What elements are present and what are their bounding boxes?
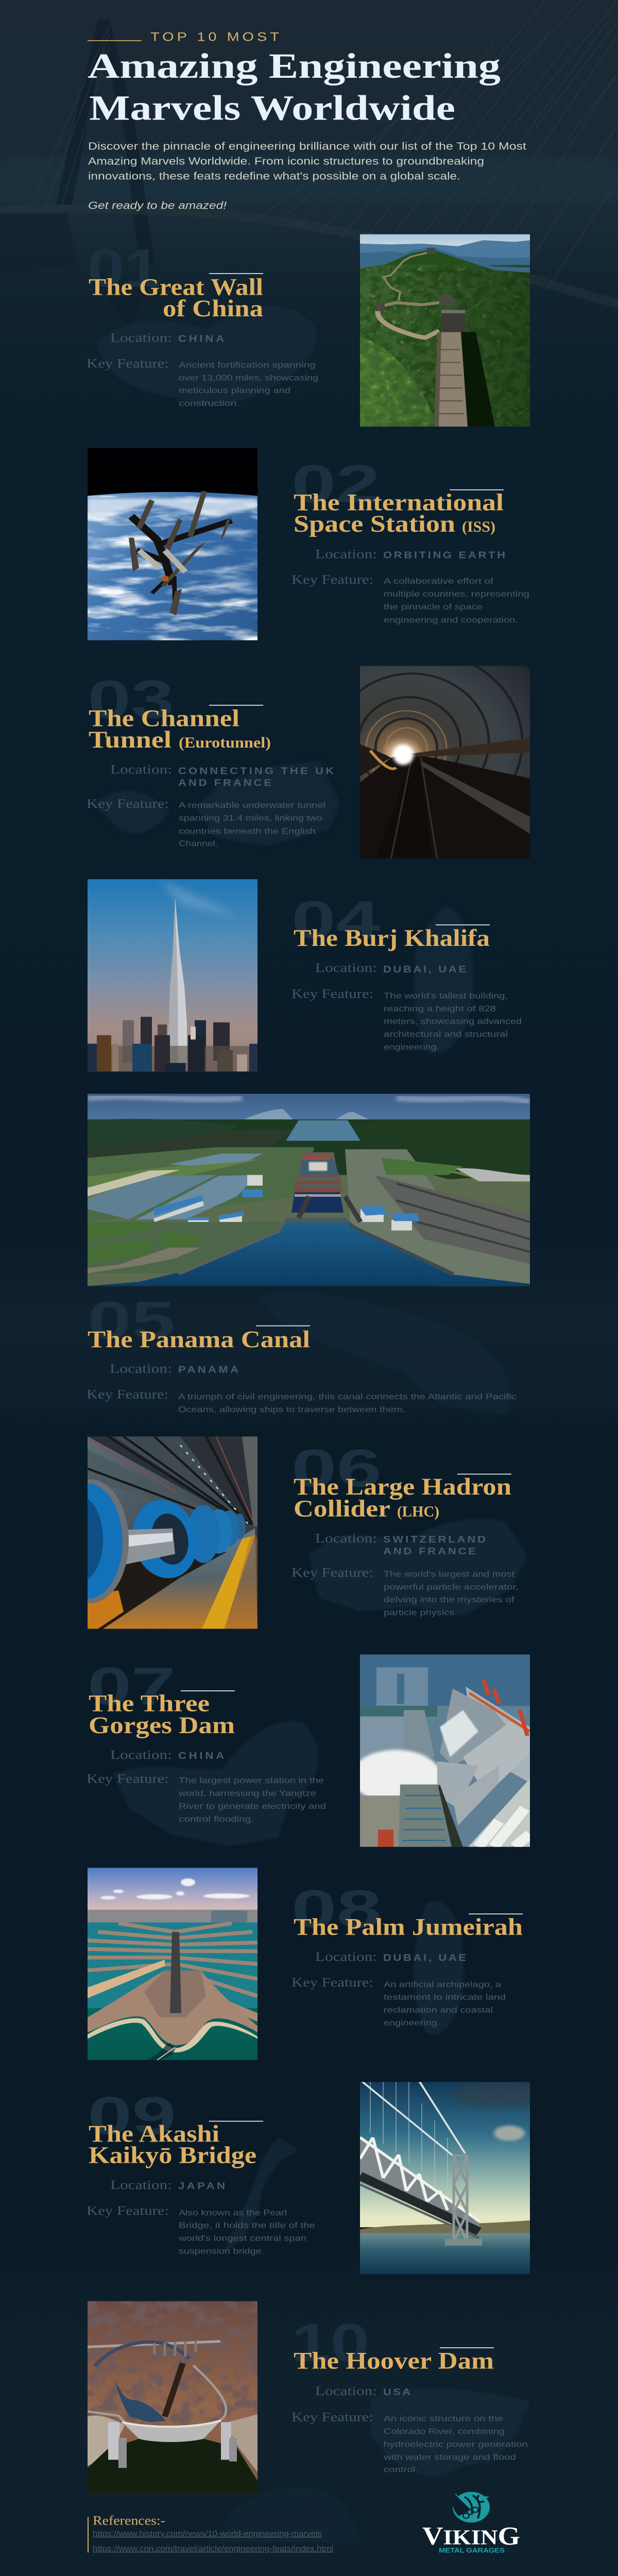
- photo: tunnel: [360, 666, 530, 858]
- key feature: A collaborative effort of: [384, 577, 493, 586]
- key feature: reaching a height of 828: [384, 1004, 496, 1013]
- key feature: An iconic structure on the: [384, 2414, 503, 2423]
- location: SWITZERLAND: [383, 1535, 486, 1545]
- key feature: Oceans, allowing ships to traverse between them.: [178, 1405, 405, 1414]
- tagline: Get ready to be amazed!: [88, 200, 227, 211]
- key feature: [87, 796, 325, 848]
- heading: [294, 489, 504, 537]
- section 07: Three Gorges Dam: [87, 1654, 530, 1847]
- key feature: [87, 1771, 326, 1823]
- number 01: 01: [88, 239, 161, 298]
- location: [110, 330, 224, 345]
- heading: Collider: [294, 1496, 390, 1522]
- title rule: [181, 1690, 235, 1691]
- section 06: Large Hadron Collider: [52, 1436, 519, 1629]
- photo: Three Gorges Dam: [360, 1654, 530, 1847]
- section 04: Burj Khalifa: [88, 879, 522, 1072]
- references heading: References:-: [93, 2513, 165, 2528]
- key feature: engineering.: [384, 2018, 440, 2027]
- heading: [89, 2121, 256, 2168]
- key feature: Key Feature:: [291, 572, 373, 587]
- key feature: The world's tallest building,: [384, 991, 508, 1001]
- key feature: A remarkable underwater tunnel: [179, 800, 325, 810]
- location: Location:: [110, 1747, 172, 1761]
- location: Location:: [110, 330, 172, 345]
- heading: (Eurotunnel): [179, 735, 271, 751]
- title rule: [457, 1473, 511, 1475]
- section 08: Palm Jumeirah: [88, 1868, 523, 2060]
- key feature: world, harnessing the Yangtze: [178, 1789, 316, 1798]
- heading: (LHC): [397, 1503, 439, 1520]
- key feature: hydroelectric power generation: [384, 2439, 528, 2449]
- location: CONNECTING THE UK: [178, 766, 334, 776]
- title rule: [209, 705, 263, 706]
- key feature: spanning 31.4 miles, linking two: [179, 813, 322, 822]
- key feature: [291, 987, 522, 1052]
- number 07: 07: [88, 1656, 175, 1716]
- key feature: with water storage and flood: [383, 2452, 516, 2462]
- key feature: [291, 1975, 506, 2027]
- location: [315, 960, 466, 975]
- key feature: Key Feature:: [291, 987, 373, 1001]
- intro paragraph: innovations, these feats redefine what's possible on a global scale.: [88, 170, 460, 182]
- heading: The Large Hadron: [294, 1473, 511, 1500]
- key feature: The world's largest and most: [384, 1569, 514, 1579]
- heading: [89, 274, 263, 322]
- title: [88, 46, 501, 128]
- section 02: ISS: [88, 448, 529, 640]
- location: Location:: [110, 2178, 172, 2192]
- photo: Hoover Dam: [88, 2301, 258, 2494]
- location: Location:: [315, 2384, 377, 2398]
- heading: The Three: [89, 1690, 210, 1717]
- title rule: [436, 924, 490, 925]
- section 01: Great Wall: [87, 234, 530, 427]
- key feature: architectural and structural: [384, 1029, 508, 1039]
- location: ORBITING EARTH: [383, 550, 505, 561]
- location: [315, 1950, 466, 1964]
- section 10: Hoover Dam: [88, 2301, 528, 2494]
- heading: (ISS): [462, 519, 495, 535]
- title rule: [450, 489, 504, 490]
- title: Marvels Worldwide: [89, 89, 455, 128]
- location: Location:: [315, 1531, 377, 1545]
- reference links: [93, 2529, 333, 2553]
- reference links: https://www.history.com/news/10-world-engineering-marvels: [93, 2529, 322, 2538]
- key feature: [87, 2203, 315, 2256]
- key feature: [87, 1387, 517, 1414]
- heading: The International: [294, 489, 504, 516]
- key feature: Key Feature:: [87, 356, 169, 370]
- photo: collider: [88, 1436, 258, 1629]
- photo: space station: [88, 448, 258, 640]
- key feature: the pinnacle of space: [384, 602, 483, 612]
- wordmark: VIKING: [422, 2521, 520, 2550]
- key feature: Key Feature:: [87, 1387, 168, 1401]
- number 02: 02: [291, 454, 380, 514]
- photo: Palm Jumeirah: [88, 1868, 258, 2060]
- key feature: Key Feature:: [291, 1565, 373, 1580]
- location: JAPAN: [178, 2181, 225, 2192]
- key feature: particle physics.: [384, 1608, 457, 1617]
- location: AND FRANCE: [178, 778, 271, 788]
- photo: Great Wall: [360, 234, 530, 427]
- location: [110, 1361, 238, 1376]
- number 09: 09: [88, 2086, 176, 2146]
- heading: Space Station: [294, 511, 455, 537]
- photo: Burj Khalifa: [88, 879, 258, 1072]
- key feature: meticulous planning and: [179, 386, 290, 395]
- location: PANAMA: [178, 1365, 238, 1375]
- title: Amazing Engineering: [88, 46, 501, 86]
- heading: The Akashi: [89, 2121, 219, 2147]
- key feature: An artificial archipelago, a: [384, 1979, 501, 1989]
- key feature: multiple countries, representing: [384, 589, 529, 599]
- background photo: cable-stayed bridge: [0, 0, 618, 316]
- location: Location:: [315, 1950, 377, 1964]
- key feature: meters, showcasing advanced: [384, 1016, 522, 1026]
- key feature: [291, 1565, 519, 1617]
- key feature: Key Feature:: [87, 1771, 169, 1786]
- photo: Akashi Bridge: [360, 2082, 530, 2274]
- heading: Gorges Dam: [89, 1712, 235, 1739]
- key feature: testament to intricate land: [384, 1992, 506, 2002]
- key feature: engineering.: [384, 1042, 439, 1052]
- photo: Panama Canal: [88, 1094, 530, 1286]
- location: [110, 1747, 224, 1761]
- location: [110, 762, 334, 788]
- header: [88, 30, 526, 211]
- number 04: 04: [291, 890, 380, 950]
- intro paragraph: [88, 140, 526, 182]
- location: DUBAI, UAE: [383, 1953, 466, 1963]
- heading: The Great Wall: [89, 274, 263, 300]
- location: Location:: [110, 762, 172, 776]
- location: [110, 2178, 225, 2192]
- location: [315, 547, 505, 561]
- heading: [294, 1473, 511, 1522]
- heading: The Hoover Dam: [294, 2348, 494, 2374]
- eyebrow rule: [88, 40, 142, 41]
- key feature: delving into the mysteries of: [384, 1595, 514, 1604]
- number 10: 10: [291, 2313, 369, 2372]
- key feature: reclamation and coastal: [384, 2005, 493, 2014]
- key feature: Bridge, it holds the title of the: [179, 2221, 315, 2230]
- location: CHINA: [178, 1751, 224, 1761]
- key feature: Also known as the Pearl: [179, 2208, 287, 2217]
- title rule: [209, 2121, 263, 2122]
- heading: Tunnel: [89, 726, 171, 753]
- key feature: engineering and cooperation.: [384, 615, 518, 624]
- heading: The Channel: [89, 705, 239, 732]
- reference bar: [88, 2517, 89, 2552]
- heading: [89, 1690, 235, 1739]
- key feature: countries beneath the English: [179, 826, 316, 836]
- number 08: 08: [291, 1879, 382, 1939]
- key feature: A triumph of civil engineering, this canal connects the Atlantic and Pacific: [178, 1392, 517, 1401]
- heading: The Palm Jumeirah: [294, 1914, 523, 1940]
- key feature: Key Feature:: [291, 1975, 373, 1989]
- eyebrow text: TOP 10 MOST: [150, 30, 279, 44]
- location: AND FRANCE: [383, 1547, 476, 1557]
- location: CHINA: [178, 334, 224, 344]
- key feature: construction.: [179, 399, 239, 408]
- number 03: 03: [88, 670, 174, 729]
- key feature: control flooding.: [179, 1814, 254, 1823]
- heading: of China: [163, 295, 263, 322]
- title rule: [209, 273, 263, 274]
- location: USA: [383, 2387, 410, 2398]
- heading: Kaikyō Bridge: [89, 2142, 256, 2168]
- key feature: Key Feature:: [87, 2203, 169, 2217]
- key feature: The largest power station in the: [179, 1776, 324, 1785]
- reference links: https://www.cnn.com/travel/article/engineering-feats/index.html: [93, 2544, 333, 2553]
- key feature: River to generate electricity and: [179, 1801, 326, 1810]
- key feature: [291, 572, 529, 624]
- heading: The Panama Canal: [88, 1326, 310, 1353]
- location: DUBAI, UAE: [383, 964, 466, 975]
- key feature: world's longest central span: [178, 2233, 306, 2243]
- location: Location:: [110, 1361, 172, 1376]
- section 09: Akashi Kaikyo Bridge: [87, 2082, 545, 2274]
- intro paragraph: Amazing Marvels Worldwide. From iconic structures to groundbreaking: [88, 155, 484, 167]
- key feature: Key Feature:: [291, 2410, 373, 2424]
- key feature: Colorado River, combining: [384, 2427, 505, 2436]
- background map silhouettes: [93, 306, 530, 2543]
- number 06: 06: [291, 1438, 382, 1498]
- location: [315, 1531, 486, 1557]
- tagline: METAL GARAGES: [439, 2547, 505, 2554]
- icon: viking ship emblem: [453, 2492, 490, 2522]
- key feature: over 13,000 miles, showcasing: [179, 373, 318, 382]
- key feature: Channel.: [179, 839, 218, 848]
- key feature: [87, 356, 318, 408]
- title rule: [440, 2347, 494, 2348]
- section 05: Panama Canal: [87, 1094, 530, 1414]
- heading: [89, 705, 271, 753]
- heading: The Burj Khalifa: [294, 925, 490, 952]
- references: [88, 2513, 333, 2553]
- intro paragraph: Discover the pinnacle of engineering brilliance with our list of the Top 10 Most: [88, 140, 526, 152]
- key feature: [291, 2410, 528, 2474]
- number 05: 05: [88, 1291, 175, 1350]
- location: Location:: [315, 547, 377, 561]
- key feature: powerful particle accelerator,: [384, 1582, 519, 1591]
- logo: Viking Metal Garages: [422, 2492, 520, 2554]
- location: Location:: [315, 960, 377, 975]
- title rule: [469, 1913, 523, 1914]
- key feature: Key Feature:: [87, 796, 169, 810]
- section 03: Channel Tunnel: [87, 622, 558, 861]
- key feature: suspension bridge.: [179, 2246, 264, 2256]
- key feature: Ancient fortification spanning: [179, 360, 316, 369]
- key feature: control.: [384, 2465, 418, 2474]
- location: [315, 2384, 410, 2398]
